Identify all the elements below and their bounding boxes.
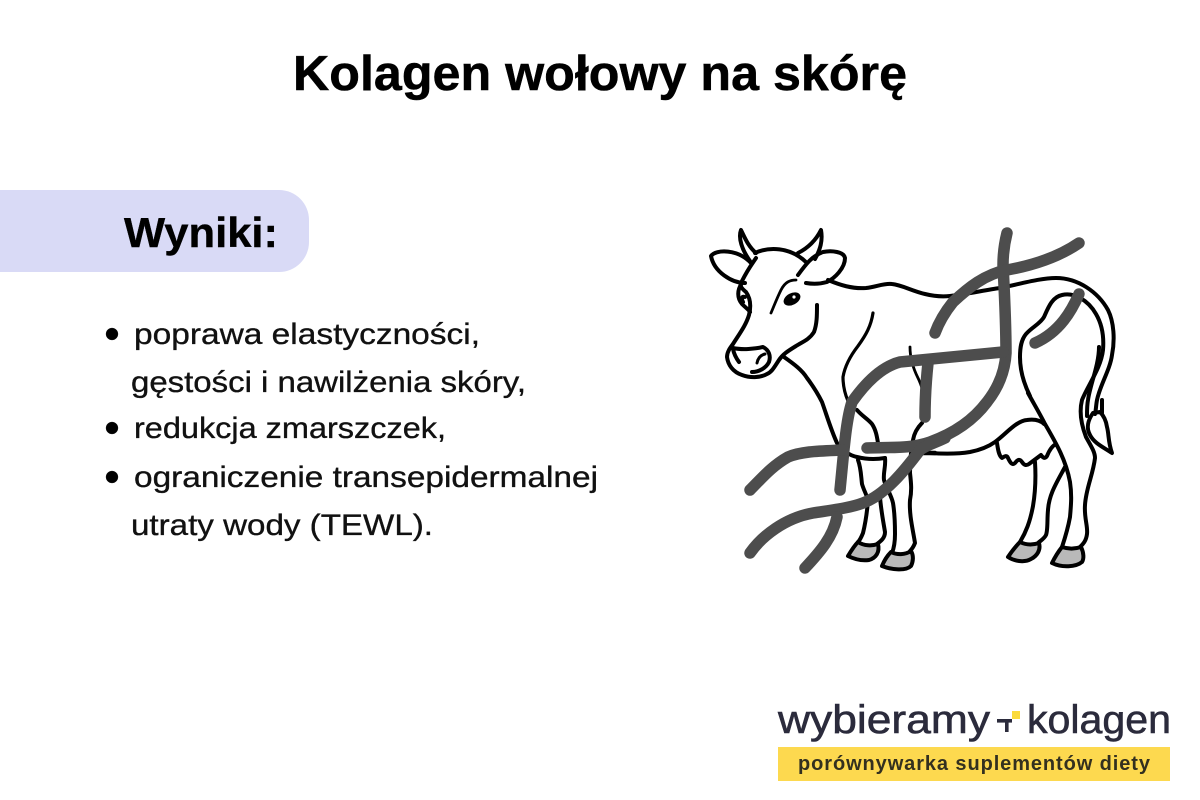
collagen helix — [750, 233, 1079, 568]
cow hooves — [848, 542, 1083, 569]
list: skin results — [106, 318, 598, 542]
logo tagline bar — [778, 747, 1170, 781]
heading: results: Wyniki: — [124, 209, 278, 256]
logo mark — [997, 711, 1020, 732]
cow nostrils — [742, 297, 765, 363]
list: skin results: poprawa elastyczności, — [134, 318, 480, 351]
logo wordmark left: wybieramy — [777, 698, 990, 742]
cow outline — [711, 230, 1114, 553]
list: skin results: gęstości i nawilżenia skóry, — [131, 366, 526, 399]
panel: results heading pill — [0, 190, 309, 272]
cow eye — [781, 290, 803, 308]
title: Kolagen wołowy na skórę — [293, 47, 907, 101]
list: skin results: utraty wody (TEWL). — [131, 509, 433, 542]
logo: wybieramy kolagen — [777, 698, 1171, 781]
logo wordmark right: kolagen — [1027, 698, 1171, 742]
list: skin results: redukcja zmarszczek, — [134, 412, 446, 445]
icon: cow with collagen helix — [711, 230, 1114, 569]
logo tagline: porównywarka suplementów diety — [798, 753, 1151, 775]
list: skin results: ograniczenie transepidermalnej — [134, 461, 598, 494]
